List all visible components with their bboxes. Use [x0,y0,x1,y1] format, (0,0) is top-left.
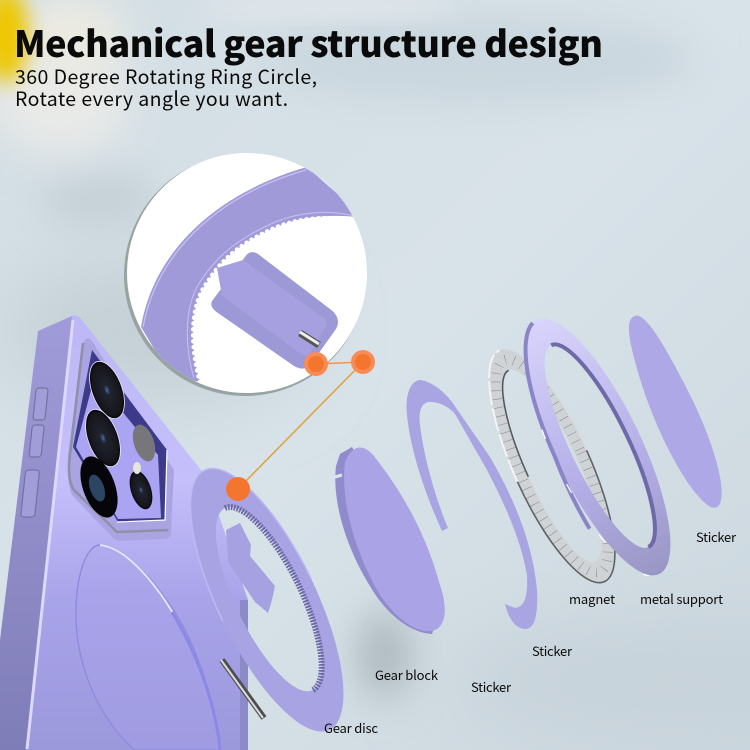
phone side face [0,316,72,750]
magnetic circle highlight [100,545,220,749]
phone back face [26,315,248,750]
label: metal support: metal support [640,589,723,608]
label: sticker: Sticker [532,641,573,660]
kickstand hinge pin [221,660,264,718]
locking block pin [300,332,319,345]
magnetic circle on back [76,545,220,750]
camera pocket [73,350,167,522]
sticker far right [629,316,722,508]
metal support ring [497,301,698,593]
label: magnet: magnet [569,589,615,608]
phone edge highlight [27,320,73,749]
label: sticker: Sticker [696,527,737,546]
gear disc teeth [225,494,342,690]
connector lines [238,362,363,489]
zoomed ring band [141,167,365,382]
camera lenses [73,357,159,523]
label: sticker: Sticker [471,677,512,696]
gear disc ring [160,449,374,750]
zoom detail circle [124,153,367,396]
label: gear disc: Gear disc [324,718,378,737]
magnet ring [465,335,639,597]
volume and power buttons [21,388,48,517]
subtitle [15,61,317,112]
gear teeth [193,218,360,382]
kickstand block [226,523,275,613]
title: Mechanical gear structure design [14,16,603,68]
marker dots [226,350,375,501]
phone [0,315,248,750]
subtitle: Rotate every angle you want. [15,83,288,112]
sticker split ring [407,380,537,629]
subtitle: 360 Degree Rotating Ring Circle, [15,61,317,90]
camera island [68,338,174,541]
label: gear block: Gear block [375,665,439,684]
locking block [211,252,338,369]
gear block [335,447,445,634]
